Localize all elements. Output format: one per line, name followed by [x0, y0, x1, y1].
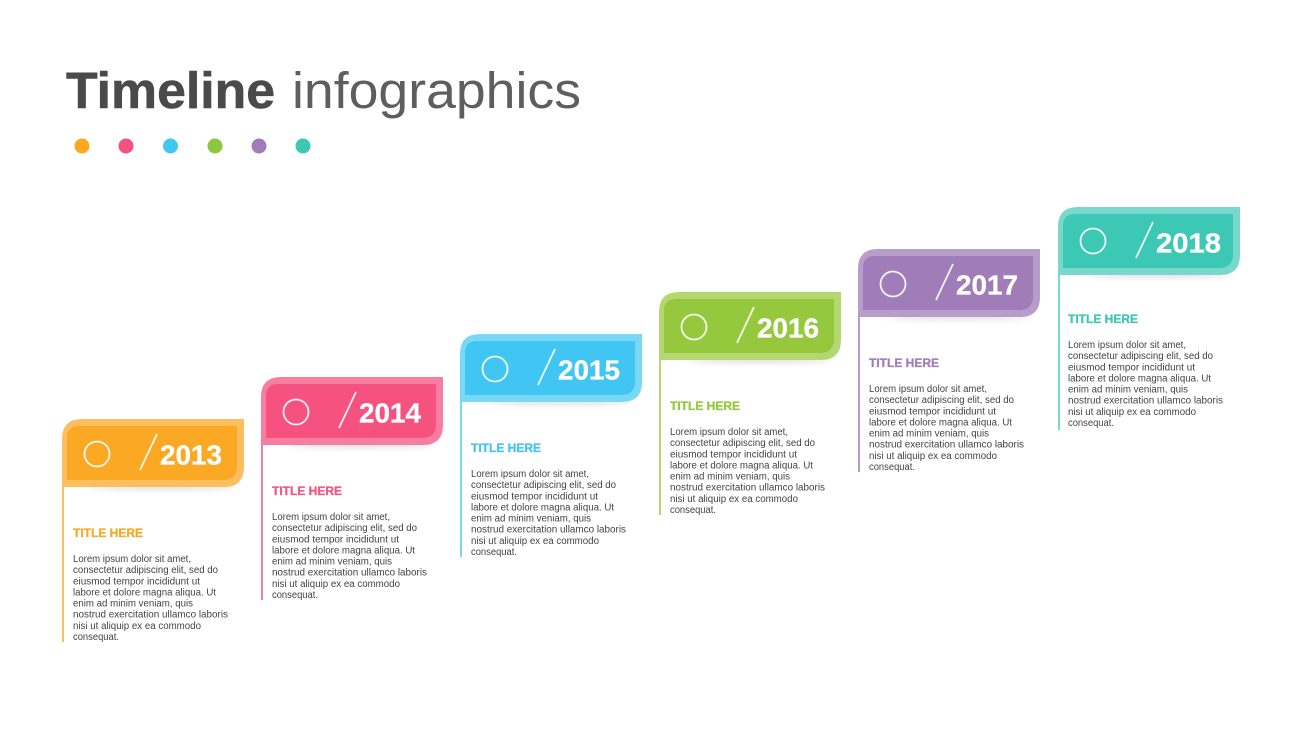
milestone 2016: 2016	[757, 312, 819, 344]
milestone 2016: enim ad minim veniam, quis	[670, 472, 790, 483]
milestone 2017: 2017	[956, 270, 1018, 300]
milestone 2018: consequat.	[1068, 418, 1114, 429]
title: Timeline	[66, 62, 275, 119]
milestone 2013	[62, 419, 244, 643]
colour dots row	[74, 138, 310, 154]
title	[66, 62, 581, 119]
milestone 2018	[1058, 207, 1240, 430]
milestone 2015	[460, 334, 642, 558]
milestone 2016: labore et dolore magna aliqua. Ut	[670, 460, 813, 471]
milestone 2018: consectetur adipiscing elit, sed do	[1068, 351, 1213, 362]
milestone 2014: consectetur adipiscing elit, sed do	[272, 523, 417, 534]
milestone 2015: Lorem ipsum dolor sit amet,	[471, 469, 589, 480]
milestone 2014: labore et dolore magna aliqua. Ut	[272, 545, 415, 556]
milestone 2017: enim ad minim veniam, quis	[869, 429, 989, 440]
milestone 2013: enim ad minim veniam, quis	[73, 599, 193, 610]
milestone 2018: labore et dolore magna aliqua. Ut	[1068, 373, 1211, 384]
milestone 2013: labore et dolore magna aliqua. Ut	[73, 587, 216, 598]
milestone 2015: nostrud exercitation ullamco laboris	[471, 525, 626, 536]
milestone 2013: 2013	[160, 440, 222, 470]
milestone 2017: consequat.	[869, 462, 915, 473]
milestone 2013: consectetur adipiscing elit, sed do	[73, 565, 218, 576]
milestone 2016: nostrud exercitation ullamco laboris	[670, 483, 825, 494]
milestone 2013: Lorem ipsum dolor sit amet,	[73, 554, 191, 565]
milestone 2015: nisi ut aliquip ex ea commodo	[471, 536, 599, 547]
milestone 2015: 2015	[558, 354, 620, 386]
milestone 2015: eiusmod tempor incididunt ut	[471, 491, 598, 502]
milestone 2014: enim ad minim veniam, quis	[272, 557, 392, 568]
milestone 2016: consectetur adipiscing elit, sed do	[670, 438, 815, 449]
milestone 2014: consequat.	[272, 590, 318, 601]
milestone 2018: TITLE HERE	[1068, 312, 1138, 326]
milestone 2013: consequat.	[73, 632, 119, 643]
milestone 2014: nisi ut aliquip ex ea commodo	[272, 579, 400, 590]
milestone 2016: TITLE HERE	[670, 399, 740, 413]
milestone 2014: Lorem ipsum dolor sit amet,	[272, 512, 390, 523]
milestone 2018: 2018	[1156, 228, 1221, 258]
milestone 2016: eiusmod tempor incididunt ut	[670, 449, 797, 460]
milestone 2017: nisi ut aliquip ex ea commodo	[869, 451, 997, 462]
milestone 2017: Lorem ipsum dolor sit amet,	[869, 384, 987, 395]
milestone 2013: TITLE HERE	[73, 526, 143, 540]
milestone 2015: consectetur adipiscing elit, sed do	[471, 480, 616, 491]
milestone 2016: Lorem ipsum dolor sit amet,	[670, 427, 788, 438]
milestone 2017: nostrud exercitation ullamco laboris	[869, 440, 1024, 451]
milestone 2013: nostrud exercitation ullamco laboris	[73, 610, 228, 621]
milestone 2016	[659, 292, 841, 516]
milestone 2014: nostrud exercitation ullamco laboris	[272, 568, 427, 579]
milestone 2013: eiusmod tempor incididunt ut	[73, 576, 200, 587]
milestone 2016: nisi ut aliquip ex ea commodo	[670, 494, 798, 505]
milestone 2015: labore et dolore magna aliqua. Ut	[471, 502, 614, 513]
milestone 2018: nostrud exercitation ullamco laboris	[1068, 396, 1223, 407]
milestone 2015: consequat.	[471, 547, 517, 558]
milestone 2016: consequat.	[670, 505, 716, 516]
milestone 2015: enim ad minim veniam, quis	[471, 514, 591, 525]
milestone 2014	[261, 377, 443, 601]
milestone 2018: enim ad minim veniam, quis	[1068, 385, 1188, 396]
milestone 2014: TITLE HERE	[272, 484, 342, 498]
milestone 2017: labore et dolore magna aliqua. Ut	[869, 417, 1012, 428]
milestone 2015: TITLE HERE	[471, 441, 541, 455]
milestone 2017: eiusmod tempor incididunt ut	[869, 406, 996, 417]
milestone 2014: eiusmod tempor incididunt ut	[272, 534, 399, 545]
milestone 2018: Lorem ipsum dolor sit amet,	[1068, 340, 1186, 351]
milestone 2017: consectetur adipiscing elit, sed do	[869, 395, 1014, 406]
milestone 2018: nisi ut aliquip ex ea commodo	[1068, 407, 1196, 418]
milestone 2017	[858, 249, 1040, 473]
milestone 2017: TITLE HERE	[869, 356, 939, 370]
milestone 2013: nisi ut aliquip ex ea commodo	[73, 621, 201, 632]
milestone 2014: 2014	[359, 398, 421, 428]
milestone 2018: eiusmod tempor incididunt ut	[1068, 362, 1195, 373]
title: infographics	[292, 62, 581, 119]
